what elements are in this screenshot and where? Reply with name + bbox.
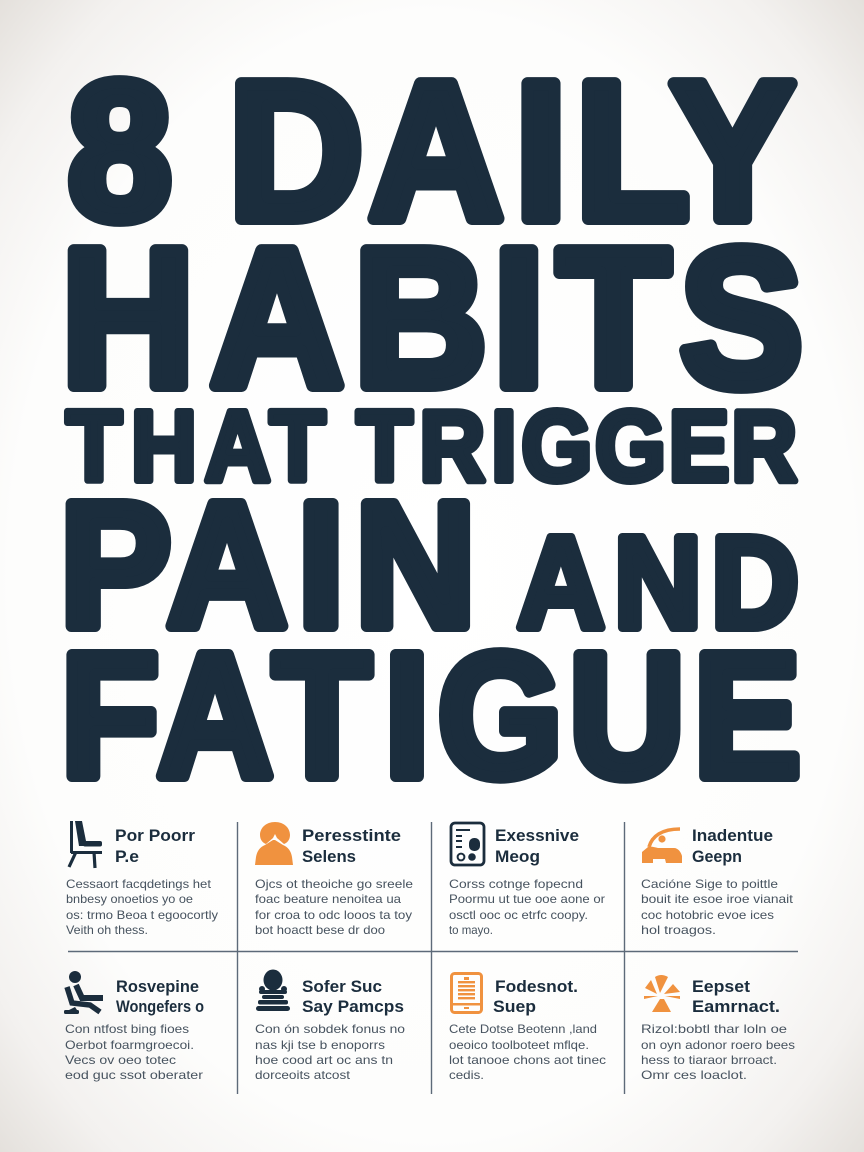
body text: os: trmo Beoa t egoocortly	[66, 908, 218, 922]
body text: Vecs ov oeo totec	[65, 1053, 176, 1067]
body text: on oyn adonor roero bees	[641, 1038, 795, 1052]
heading: Geepn	[692, 848, 742, 866]
panel: habit 6	[255, 970, 405, 1082]
icon: phone screen	[451, 823, 484, 865]
body text: Rizol:bobtl thar loln oe	[641, 1022, 787, 1036]
heading: Say Pamcps	[302, 998, 404, 1016]
heading: Eamrnact.	[692, 998, 780, 1016]
body text: coc hotobric evoe ices	[641, 908, 774, 922]
icon: tablet	[451, 974, 482, 1012]
body text: Corss cotnge fopecnd	[449, 877, 583, 891]
body text: to mayo.	[449, 923, 493, 937]
heading: Inadentue	[692, 827, 773, 845]
body text: cedis.	[449, 1068, 484, 1082]
icon: chair	[69, 821, 102, 868]
heading: Wongefers o	[116, 998, 204, 1016]
heading: Meog	[495, 848, 540, 866]
heading: Suep	[493, 998, 536, 1016]
body text: Cete Dotse Beotenn ,land	[449, 1022, 597, 1036]
panel: habit 1	[66, 821, 218, 937]
grid lines	[68, 822, 798, 1094]
body text: Cessaort facqdetings het	[66, 877, 212, 891]
heading: Selens	[302, 848, 356, 866]
heading: P.e	[115, 848, 139, 866]
heading: Sofer Suc	[302, 978, 382, 996]
title: THAT TRIGGER	[66, 391, 797, 502]
panel: habit 3	[449, 823, 605, 937]
icon: burst	[644, 975, 680, 1012]
body text: hess to tiaraor brroact.	[641, 1053, 777, 1067]
body text: osctl ooc oc etrfc coopy.	[449, 908, 588, 922]
body text: nas kji tse b enoporrs	[255, 1038, 385, 1052]
panel: habit 8	[641, 975, 795, 1082]
body text: Cacióne Sige to poittle	[641, 877, 778, 891]
panel: habit 2	[255, 822, 413, 937]
body text: eod guc ssot oberater	[65, 1068, 203, 1082]
icon: meditating figure	[256, 970, 290, 1011]
body text: Ojcs ot theoiche go sreele	[255, 877, 413, 891]
body text: bnbesy onoetios yo oe	[66, 892, 193, 906]
body text: Veith oh thess.	[66, 923, 148, 937]
body text: Omr ces loaclot.	[641, 1068, 747, 1082]
body text: Oerbot foarmgroecoi.	[65, 1038, 194, 1052]
body text: hol troagos.	[641, 923, 716, 937]
heading: Eepset	[692, 978, 751, 996]
body text: Con ón sobdek fonus no	[255, 1022, 405, 1036]
body text: oeoico toolboteet mflqe.	[449, 1038, 589, 1052]
title: 8 DAILY	[68, 41, 795, 261]
heading: Rosvepine	[116, 978, 199, 996]
title: PAIN	[60, 466, 476, 664]
body text: foac beature nenoitea ua	[255, 892, 401, 906]
heading: Fodesnot.	[495, 978, 578, 996]
title: FATIGUE	[61, 617, 801, 814]
panel: habit 5	[64, 971, 204, 1082]
title: AND	[517, 509, 799, 655]
body text: dorceoits atcost	[255, 1068, 351, 1082]
icon: person	[255, 822, 293, 865]
body text: lot tanooe chons aot tinec	[449, 1053, 606, 1067]
icon: resting figure	[642, 829, 682, 863]
title: HABITS	[61, 209, 803, 428]
icon: reclining person	[64, 971, 103, 1014]
body text: bouit ite esoe iroe vianait	[641, 892, 794, 906]
heading: Exessnive	[495, 827, 579, 845]
heading: Peresstinte	[302, 827, 401, 845]
title	[60, 41, 803, 814]
body text: hoe cood art oc ans tn	[255, 1053, 393, 1067]
body text: for croa to odc looos ta toy	[255, 908, 412, 922]
panel: habit 4	[641, 827, 794, 937]
heading: Por Poorr	[115, 827, 196, 845]
panel: habit 7	[449, 974, 606, 1082]
body text: bot hoactt bese dr doo	[255, 923, 385, 937]
body text: Con ntfost bing fioes	[65, 1022, 189, 1036]
body text: Poormu ut tue ooe aone or	[449, 892, 605, 906]
